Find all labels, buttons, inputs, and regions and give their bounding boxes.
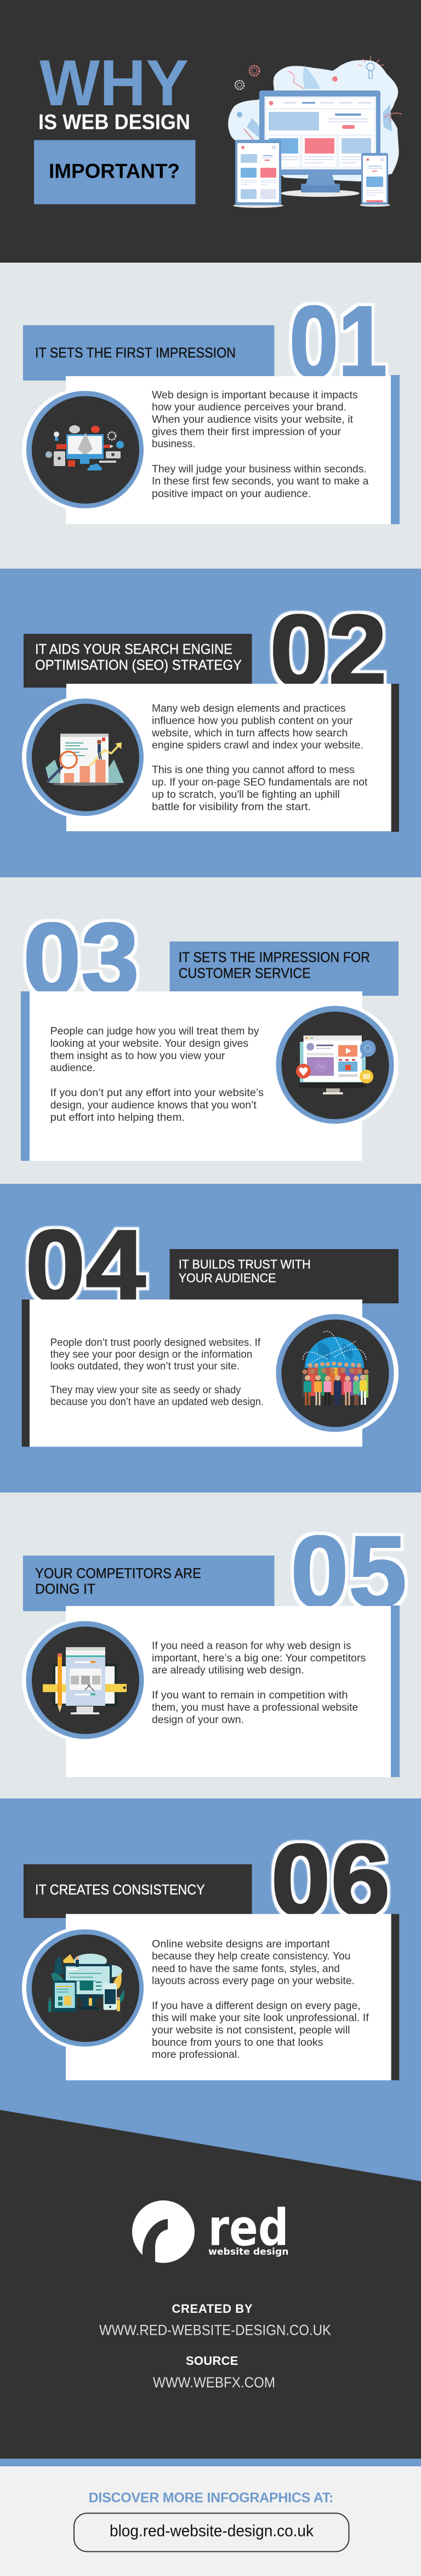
number 01: 01 bbox=[289, 286, 387, 399]
icon: crowd and globe in circle bbox=[276, 1312, 399, 1434]
body text: up. If your on-page SEO fundamentals are not bbox=[152, 777, 368, 788]
body text: important, here’s a big one: Your competitors bbox=[152, 1653, 366, 1664]
body text: influence how you publish content on your bbox=[152, 716, 353, 727]
heading bar bbox=[24, 634, 252, 688]
section 1: first impression bbox=[0, 263, 421, 569]
heading bar: CUSTOMER SERVICE bbox=[179, 965, 311, 981]
body text: audience. bbox=[50, 1062, 95, 1074]
body text: positive impact on your audience. bbox=[152, 489, 311, 500]
body text: design, your audience knows that you won’t bbox=[50, 1099, 257, 1111]
body text: put effort into helping them. bbox=[50, 1112, 185, 1124]
heading bar: IT BUILDS TRUST WITH bbox=[179, 1257, 311, 1271]
body text: Web design is important because it impacts bbox=[152, 389, 358, 401]
body text: how your audience perceives your brand. bbox=[152, 402, 346, 413]
title: is web design: IS WEB DESIGN bbox=[38, 111, 190, 134]
body text bbox=[50, 1025, 264, 1124]
heading bar bbox=[170, 1249, 399, 1303]
body text: This is one thing you cannot afford to mess bbox=[152, 764, 355, 776]
section 5: competitors bbox=[0, 1493, 421, 1798]
credit: website: WWW.RED-WEBSITE-DESIGN.CO.UK bbox=[99, 2322, 331, 2339]
heading bar bbox=[170, 941, 399, 996]
body text: battle for visibility from the start. bbox=[152, 801, 311, 813]
body text: engine spiders crawl and index your website. bbox=[152, 740, 363, 751]
body text: them insight as to how you view your bbox=[50, 1050, 225, 1062]
text card bbox=[66, 1914, 399, 2080]
body text bbox=[151, 703, 368, 813]
icon: multi-device teal illustration in circle bbox=[22, 1927, 145, 2050]
logo: website design bbox=[208, 2246, 288, 2257]
credit: source url: WWW.WEBFX.COM bbox=[153, 2374, 275, 2391]
body text: Online website designs are important bbox=[152, 1938, 330, 1950]
section 4: trust bbox=[0, 1184, 421, 1493]
icon: wireframe, ruler and pencil in circle bbox=[22, 1619, 145, 1741]
body text: They may view your site as seedy or shady bbox=[50, 1385, 241, 1396]
illustration: responsive devices bbox=[228, 56, 402, 208]
body text: more professional. bbox=[152, 2049, 240, 2061]
url pill bbox=[74, 2513, 349, 2552]
url pill: blog.red-website-design.co.uk bbox=[110, 2522, 314, 2540]
body text: they see your poor design or the information bbox=[50, 1349, 252, 1360]
body text bbox=[152, 1938, 369, 2061]
body text: If you want to remain in competition with bbox=[152, 1689, 348, 1701]
icon: website with social badges in circle bbox=[276, 1003, 399, 1126]
heading bar: IT CREATES CONSISTENCY bbox=[35, 1881, 205, 1898]
body text: gives them their first impression of your bbox=[152, 427, 342, 438]
footer panel bbox=[0, 2110, 421, 2459]
title box: important: IMPORTANT? bbox=[49, 160, 180, 183]
body text: need to have the same fonts, styles, and bbox=[152, 1963, 340, 1974]
header panel bbox=[0, 0, 421, 263]
title box: important bbox=[34, 140, 195, 204]
text card bbox=[66, 1605, 400, 1777]
discover panel bbox=[0, 2466, 421, 2576]
number 02: 02 bbox=[270, 594, 387, 707]
body text: them, you must have a professional website bbox=[152, 1702, 358, 1713]
number 06: 06 bbox=[271, 1824, 390, 1937]
body text: When your audience visits your website, it bbox=[152, 414, 354, 425]
credit: created by: CREATED BY bbox=[172, 2302, 253, 2316]
heading bar bbox=[24, 1864, 252, 1918]
icon: seo chart in circle bbox=[22, 696, 145, 819]
body text: website, which in turn affects how search bbox=[151, 728, 348, 739]
body text: are already utilising web design. bbox=[152, 1665, 304, 1676]
body text: Many web design elements and practices bbox=[152, 703, 346, 714]
discover heading: DISCOVER MORE INFOGRAPHICS AT: bbox=[89, 2490, 333, 2506]
body text: because you don’t have an updated web design. bbox=[50, 1396, 264, 1408]
body text: this will make your site look unprofessional. If bbox=[152, 2012, 369, 2024]
body text: If you have a different design on every page, bbox=[152, 2000, 361, 2012]
body text: If you need a reason for why web design is bbox=[152, 1640, 351, 1652]
body text: design of your own. bbox=[152, 1714, 244, 1726]
heading bar: YOUR COMPETITORS ARE bbox=[35, 1565, 201, 1581]
section 2: seo strategy bbox=[0, 569, 421, 877]
heading bar bbox=[23, 325, 274, 381]
heading bar: IT SETS THE FIRST IMPRESSION bbox=[35, 344, 236, 361]
body text: If you don’t put any effort into your website’s bbox=[50, 1087, 264, 1099]
body text: bounce from yours to one that looks bbox=[152, 2037, 323, 2049]
text card bbox=[21, 991, 362, 1161]
number 03: 03 bbox=[23, 903, 139, 1015]
body text: People can judge how you will treat them by bbox=[50, 1025, 259, 1037]
number 04: 04 bbox=[25, 1210, 146, 1323]
body text: up to scratch, you'll be fighting an uphill bbox=[152, 789, 340, 801]
heading bar: YOUR AUDIENCE bbox=[179, 1271, 276, 1285]
icon: website with social badges in circle: Ad bbox=[317, 1064, 323, 1070]
body text: They will judge your business within seconds. bbox=[152, 463, 367, 475]
body text: People don’t trust poorly designed websites. If bbox=[50, 1337, 261, 1349]
number 05: 05 bbox=[291, 1516, 407, 1629]
body text: your website is not consistent, people will bbox=[152, 2024, 350, 2036]
body text: In these first few seconds, you want to make a bbox=[152, 476, 369, 487]
logo: red bbox=[208, 2199, 289, 2257]
heading bar: IT AIDS YOUR SEARCH ENGINE bbox=[35, 640, 232, 657]
logo bbox=[132, 2199, 289, 2265]
body text: layouts across every page on your website. bbox=[152, 1975, 355, 1987]
text card bbox=[22, 1300, 362, 1446]
body text: looking at your website. Your design gives bbox=[50, 1038, 248, 1049]
icon: design tools in circle bbox=[22, 388, 145, 511]
heading bar: DOING IT bbox=[35, 1581, 95, 1597]
heading bar: IT SETS THE IMPRESSION FOR bbox=[179, 949, 370, 966]
section 6: consistency bbox=[0, 1798, 421, 2193]
body text: business. bbox=[152, 439, 195, 450]
body text bbox=[152, 1640, 366, 1726]
body text bbox=[152, 389, 369, 500]
credit: source: SOURCE bbox=[186, 2354, 238, 2368]
body text: because they help create consistency. You bbox=[152, 1951, 350, 1962]
accent bar bbox=[0, 2459, 421, 2466]
body text bbox=[50, 1337, 264, 1408]
body text: looks outdated, they won’t trust your site. bbox=[50, 1360, 240, 1372]
heading bar: OPTIMISATION (SEO) STRATEGY bbox=[35, 656, 242, 673]
text card bbox=[66, 684, 399, 832]
text card bbox=[66, 375, 400, 524]
title: why: WHY bbox=[39, 47, 189, 120]
heading bar bbox=[23, 1556, 274, 1611]
section 3: customer service bbox=[0, 877, 421, 1184]
